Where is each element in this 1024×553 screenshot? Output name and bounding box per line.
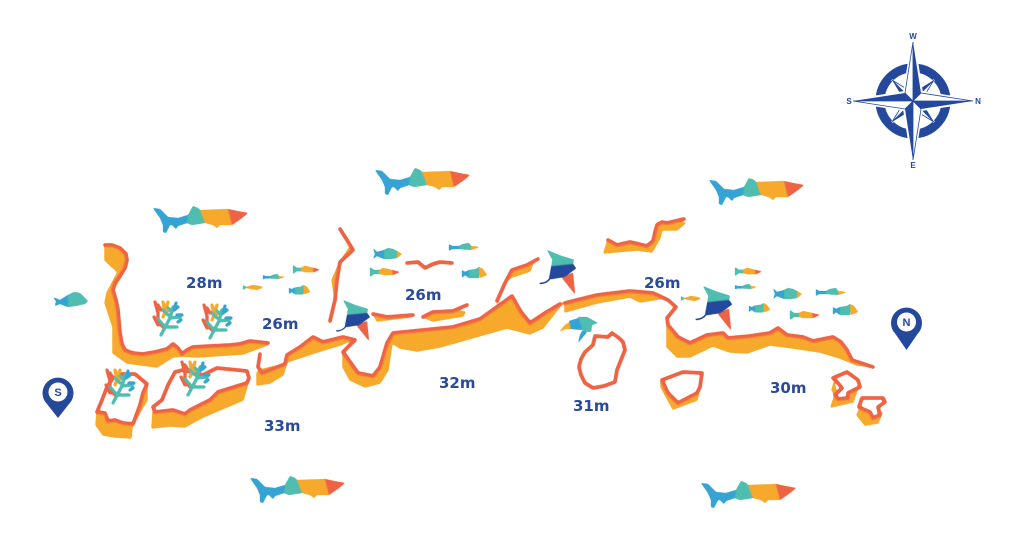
icon: coral 2 bbox=[203, 305, 231, 338]
reef: small fragment 2 bbox=[423, 305, 467, 321]
icon: fish bbox=[370, 267, 400, 277]
reef: vertical fragment bbox=[330, 229, 353, 321]
icon: manta ray 3 bbox=[695, 286, 732, 330]
marine life bbox=[53, 168, 858, 508]
depth label: 28m: 28m bbox=[186, 274, 223, 292]
reef: small fragment 1 bbox=[373, 314, 413, 321]
icon: coral 4 bbox=[181, 362, 209, 395]
icon: fish bbox=[243, 285, 263, 290]
icon: coral 3 bbox=[106, 370, 134, 403]
icon: south pin: S bbox=[54, 387, 62, 399]
depth label: 26m: 26m bbox=[405, 286, 442, 304]
icon: fish bbox=[816, 288, 847, 296]
depth label: 31m: 31m bbox=[573, 397, 610, 415]
icon: large left fish bbox=[53, 292, 88, 307]
icon: fish bbox=[681, 296, 701, 301]
reef: small island 1 bbox=[831, 372, 860, 407]
reef: small fragment 3 bbox=[497, 259, 538, 301]
icon: whale shark 3 bbox=[709, 178, 804, 205]
icon: fish bbox=[790, 310, 820, 320]
reef: left L-shaped reef bbox=[105, 245, 268, 367]
reef: far left island bbox=[96, 374, 147, 438]
reef map bbox=[96, 219, 885, 438]
icon: sea turtle bbox=[559, 317, 598, 343]
icon: compass rose: S bbox=[846, 97, 852, 106]
icon: manta ray 2 bbox=[539, 250, 576, 294]
icon: fish bbox=[449, 243, 480, 251]
icon: compass rose: N bbox=[975, 97, 981, 106]
icon: fish bbox=[289, 285, 310, 294]
icon: south pin bbox=[42, 378, 74, 418]
icon: fish bbox=[735, 284, 757, 290]
icon: north pin: N bbox=[903, 317, 911, 329]
icon: fish bbox=[735, 267, 762, 276]
depth label: 30m: 30m bbox=[770, 379, 807, 397]
icon: fish bbox=[373, 248, 402, 259]
icon: fish bbox=[773, 288, 802, 299]
depth label: 26m: 26m bbox=[644, 274, 681, 292]
icon: manta ray 1 bbox=[336, 300, 370, 341]
depth label: 26m: 26m bbox=[262, 315, 299, 333]
icon: fish bbox=[263, 274, 285, 280]
icon: fish bbox=[833, 304, 858, 315]
icon: north pin bbox=[891, 308, 922, 350]
depth label: 32m: 32m bbox=[439, 374, 476, 392]
icon: whale shark 1 bbox=[153, 206, 248, 233]
reef: small island 2 bbox=[857, 398, 885, 425]
icon: compass rose: E bbox=[910, 161, 916, 170]
depth label: 33m: 33m bbox=[264, 417, 301, 435]
icon: fish bbox=[293, 265, 320, 274]
reef: centre right island bbox=[661, 372, 702, 409]
icon: compass rose: W bbox=[909, 32, 917, 41]
icon: whale shark 5 bbox=[701, 481, 796, 508]
icon: fish bbox=[749, 303, 770, 312]
icon: fish bbox=[462, 267, 487, 278]
icon: whale shark 4 bbox=[250, 476, 345, 503]
reef: round island outline bbox=[579, 333, 625, 388]
icon: compass rose bbox=[846, 32, 981, 170]
icon: whale shark 2 bbox=[375, 168, 470, 195]
reef: upper right fragment bbox=[604, 219, 685, 253]
reef: right long reef bbox=[565, 291, 873, 367]
reef: squiggle fragment bbox=[407, 262, 452, 268]
reef: central long reef bbox=[257, 296, 563, 387]
icon: coral 1 bbox=[154, 302, 182, 335]
reef: second left island bbox=[152, 368, 249, 428]
